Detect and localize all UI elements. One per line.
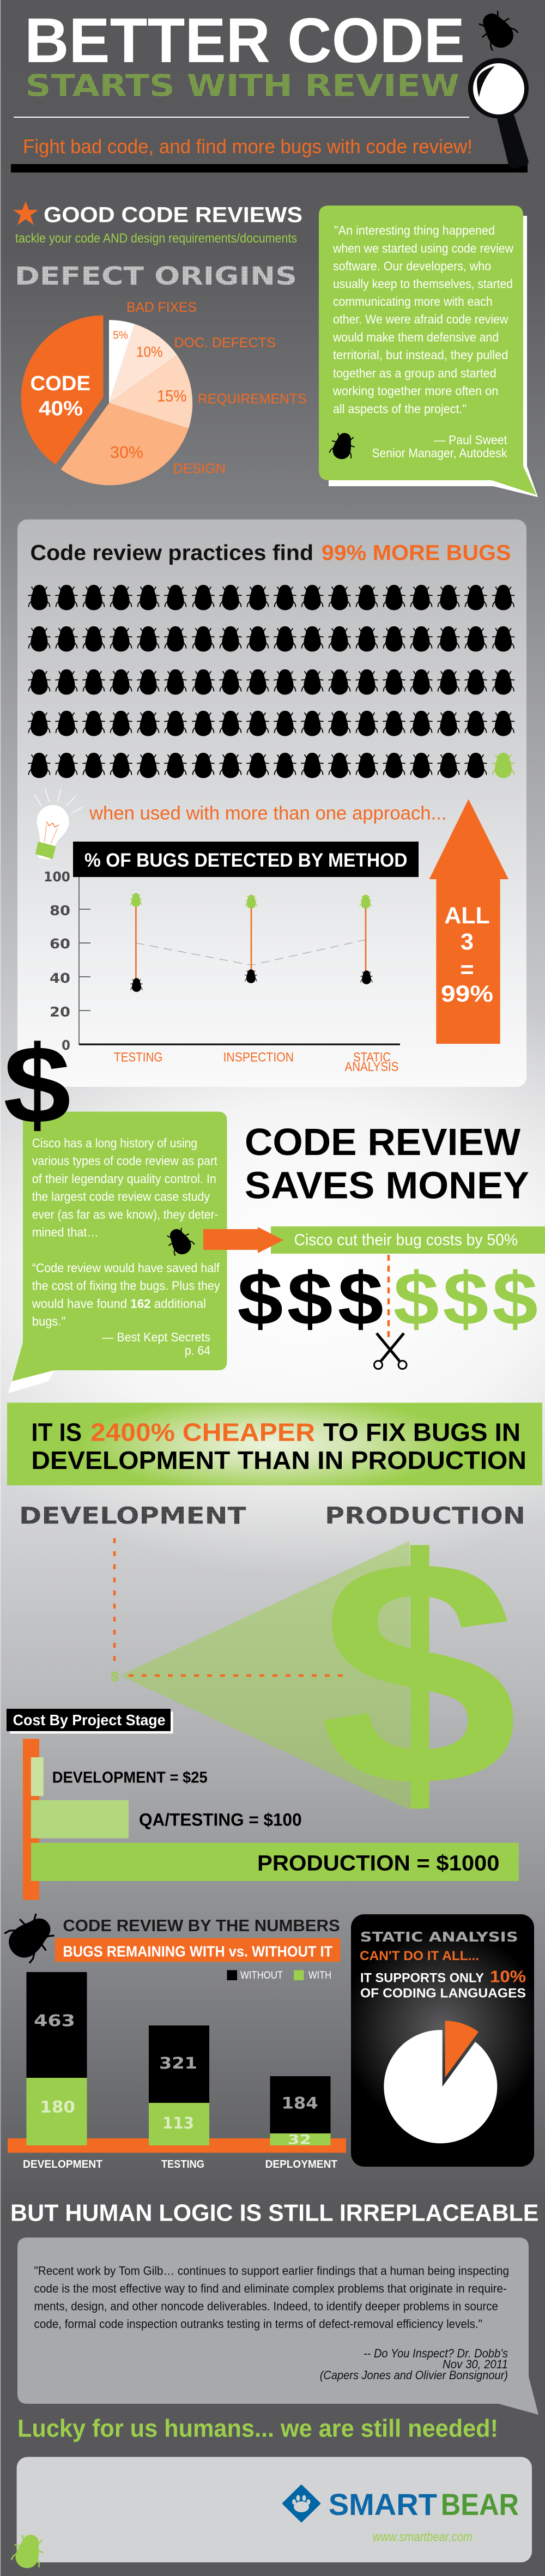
callout: tom gilb quote <box>17 2238 538 2415</box>
pie chart: defect origins: 5% <box>113 329 128 341</box>
pie chart: defect origins: CODE <box>31 372 90 395</box>
bar chart: DEVELOPMENT = $25 <box>52 1769 208 1787</box>
callout: tom gilb quote: "Recent work by Tom Gilb… continues to support earlier findings that a human being inspecting <box>34 2264 509 2277</box>
callout: autodesk quote: other. We were afraid code review <box>333 312 508 326</box>
callout: cisco case study: p. 64 <box>185 1343 210 1357</box>
header <box>11 5 529 172</box>
heading: CODE REVIEW BY THE NUMBERS <box>63 1916 340 1935</box>
dollar row: $ <box>492 1257 538 1341</box>
bar chart: bugs remaining: 184 <box>282 2094 318 2113</box>
callout: tom gilb quote: ments, design, and other noncode deliverables. Indeed, to identify deeper problems in source <box>34 2299 498 2313</box>
pie chart: 10 percent <box>384 2021 497 2143</box>
logo: smartbear <box>283 2486 519 2521</box>
dollar row: $ <box>443 1257 488 1341</box>
panel: static analysis: 10% <box>490 1967 526 1986</box>
legend: WITH <box>308 1970 331 1981</box>
panel: cost by project stage <box>7 1709 519 1900</box>
dollar row: $ <box>287 1257 333 1341</box>
callout: autodesk quote <box>319 205 538 497</box>
callout: autodesk quote: Senior Manager, Autodesk <box>372 446 507 460</box>
banner: cisco cut bug costs: Cisco cut their bug costs by 50% <box>294 1231 518 1249</box>
heading: production: PRODUCTION <box>325 1502 525 1529</box>
bar chart: PRODUCTION = $1000 <box>257 1851 499 1875</box>
banner: cisco cut bug costs <box>271 1226 545 1254</box>
pie labels <box>126 300 306 476</box>
icon: bug in cisco quote <box>164 1224 196 1259</box>
panel: static analysis <box>351 1914 534 2167</box>
callout: cisco case study: Cisco has a long history of using <box>32 1136 197 1150</box>
pie chart: defect origins: 30% <box>110 443 143 462</box>
chart: percent of bugs detected by method: % OF BUGS DETECTED BY METHOD <box>84 850 408 871</box>
bar chart: bugs remaining: 32 <box>288 2132 311 2148</box>
banner: 2400% cheaper: IT IS <box>31 1418 82 1447</box>
axis numbers: 60 <box>50 936 70 952</box>
axis numbers: 0 <box>62 1037 70 1053</box>
chart x labels <box>114 1050 399 1074</box>
pie labels: DESIGN <box>173 461 226 476</box>
chart title <box>73 842 419 877</box>
pie chart: defect origins: 10% <box>136 343 162 360</box>
panel: code review by the numbers <box>0 1907 346 2170</box>
callout: autodesk quote: "An interesting thing happened <box>334 223 495 238</box>
callout: cisco case study: ever (as far as we know), they deter- <box>32 1207 218 1222</box>
banner: 2400% cheaper: DEVELOPMENT THAN IN PRODUCTION <box>31 1446 526 1474</box>
bar chart: bugs remaining <box>8 1972 346 2170</box>
callout: autodesk quote: would make them defensive and <box>332 330 499 344</box>
heading: 99% more bugs: Code review practices find <box>31 541 313 565</box>
callout: autodesk quote: usually keep to themselves, started <box>333 277 513 291</box>
callout: autodesk quote: software. Our developers, who <box>333 259 491 273</box>
arrow: orange <box>203 1227 283 1253</box>
bar chart: bugs remaining: DEPLOYMENT <box>265 2158 337 2170</box>
banner: 2400% cheaper: 2400% CHEAPER <box>90 1418 315 1447</box>
pie labels: DOC. DEFECTS <box>174 335 276 350</box>
chart x labels: TESTING <box>114 1050 162 1065</box>
callout: autodesk quote: working together more often on <box>332 384 498 398</box>
axis numbers <box>44 869 70 1053</box>
dollar row <box>237 1257 538 1341</box>
callout: autodesk quote: together as a group and started <box>333 366 496 380</box>
pie chart: defect origins: 40% <box>39 397 83 420</box>
heading: code review saves money <box>245 1121 529 1207</box>
arrow: all 3 = 99% <box>429 799 508 1044</box>
text: when used with more than one approach: when used with more than one approach... <box>89 802 446 824</box>
arrow: all 3 = 99%: = <box>460 957 474 983</box>
arrow: all 3 = 99%: 3 <box>461 929 474 955</box>
panel: development vs production <box>19 1493 525 1853</box>
icon: light bulb <box>34 789 83 860</box>
legend: WITHOUT <box>240 1970 283 1981</box>
chart x labels: ANALYSIS <box>344 1060 399 1074</box>
pie chart: defect origins <box>21 315 192 485</box>
heading: code review saves money: SAVES MONEY <box>245 1164 529 1207</box>
panel: static analysis: CAN'T DO IT ALL... <box>360 1949 479 1963</box>
pie labels: REQUIREMENTS <box>198 391 306 407</box>
icon: magnifying glass <box>468 58 529 168</box>
heading: Cost By Project Stage <box>13 1712 166 1728</box>
icon: bug <box>0 1907 60 1967</box>
callout: tom gilb quote: -- Do You Inspect? Dr. Dobb's <box>364 2347 508 2360</box>
tagline: Fight bad code, and find more bugs with code review! <box>23 135 473 158</box>
bar chart: bugs remaining: DEVELOPMENT <box>23 2158 102 2170</box>
bar chart: bugs remaining: 113 <box>162 2114 194 2132</box>
callout: cisco case study: would have found 162 additional <box>32 1296 206 1310</box>
panel: code review saves money <box>203 1121 545 1369</box>
black underline bar <box>11 164 528 172</box>
panel: code review practices <box>17 519 526 1087</box>
icon: bug in quote <box>329 430 357 462</box>
subtitle: starts with review: STARTS WITH REVIEW <box>26 68 459 103</box>
panel: good code reviews <box>13 201 306 485</box>
logo: smartbear: SMART <box>329 2487 437 2521</box>
callout: autodesk quote: communicating more with each <box>333 294 493 309</box>
dollar row: $ <box>237 1257 283 1341</box>
chart x labels: INSPECTION <box>223 1050 294 1065</box>
heading: code review saves money: CODE REVIEW <box>245 1121 520 1163</box>
chart x labels: STATIC <box>353 1050 391 1065</box>
heading: development: DEVELOPMENT <box>19 1502 246 1529</box>
callout: cisco case study: the cost of fixing the bugs. Plus they <box>32 1279 220 1293</box>
heading <box>7 1709 173 1733</box>
callout: autodesk quote: all aspects of the project." <box>333 402 467 416</box>
heading: defect origins: DEFECT ORIGINS <box>15 262 297 291</box>
dashed cut line <box>387 1255 390 1339</box>
callout: autodesk quote: — Paul Sweet <box>434 433 507 447</box>
bar chart: bugs remaining: TESTING <box>161 2158 204 2170</box>
arrow: all 3 = 99%: ALL <box>444 903 490 929</box>
text: lucky for us humans: Lucky for us humans... we are still needed! <box>17 2415 498 2442</box>
axis numbers: 100 <box>44 869 70 885</box>
title: better code: BETTER CODE <box>25 5 465 76</box>
subheading band: BUGS REMAINING WITH vs. WITHOUT IT <box>63 1943 332 1960</box>
panel: static analysis: OF CODING LANGUAGES <box>360 1986 526 2000</box>
banner: 2400% cheaper <box>7 1403 542 1485</box>
bug grid: 99 of 100 bugs <box>28 585 514 778</box>
icon: scissors <box>374 1333 407 1369</box>
axis numbers: 20 <box>50 1004 70 1020</box>
subheading: tackle your code AND design requirements/documents <box>15 231 297 246</box>
pie labels: BAD FIXES <box>126 300 197 315</box>
arrow: all 3 = 99%: 99% <box>441 981 493 1007</box>
axis numbers: 80 <box>50 903 70 918</box>
callout: cisco case study: various types of code review as part <box>32 1154 218 1168</box>
icon: small dollar: $ <box>111 1669 119 1684</box>
bar chart: bugs remaining: 321 <box>159 2054 197 2072</box>
callout: autodesk quote: territorial, but instead, they pulled <box>333 348 508 362</box>
icon: large dollar: $ <box>319 1493 518 1853</box>
dollar row: $ <box>338 1257 384 1341</box>
callout: cisco case study: — Best Kept Secrets <box>102 1330 210 1344</box>
bar chart: bugs remaining: 463 <box>34 2011 75 2030</box>
icon: green bug <box>10 2531 47 2572</box>
callout: cisco case study: the largest code review case study <box>32 1189 210 1204</box>
bar chart: QA/TESTING = $100 <box>139 1810 302 1829</box>
callout: cisco case study: bugs.” <box>32 1314 65 1328</box>
callout: cisco case study <box>8 1112 227 1393</box>
heading: good code reviews: GOOD CODE REVIEWS <box>44 203 302 227</box>
axis numbers: 40 <box>50 970 70 986</box>
callout: autodesk quote: when we started using code review <box>332 241 513 255</box>
cone of cost <box>120 1541 409 1810</box>
website: www.smartbear.com <box>373 2530 473 2544</box>
callout: tom gilb quote: code is the most effective way to find and eliminate complex problems that originate in require- <box>34 2282 507 2295</box>
callout: cisco case study: “Code review would have saved half <box>32 1261 220 1275</box>
heading: human logic: BUT HUMAN LOGIC IS STILL IRREPLACEABLE <box>10 2200 538 2226</box>
pie chart: defect origins: 15% <box>157 387 186 406</box>
subheading band <box>55 1938 340 1962</box>
icon: big black dollar sign: $ <box>3 1023 71 1147</box>
banner: 2400% cheaper: TO FIX BUGS IN <box>323 1418 520 1447</box>
chart: percent of bugs detected by method <box>44 842 419 1074</box>
icon: bug on top of magnifier <box>474 6 521 55</box>
heading: 99% more bugs <box>31 541 511 565</box>
callout: cisco case study: mined that… <box>32 1225 99 1239</box>
panel: static analysis: STATIC ANALYSIS <box>360 1929 518 1945</box>
callout: tom gilb quote: code, formal code inspection outranks testing in terms of defect-removal efficiency levels." <box>34 2317 482 2331</box>
legend <box>227 1970 331 1981</box>
dashed axes <box>114 1538 347 1676</box>
icon: star <box>13 201 38 225</box>
dollar row: $ <box>393 1257 439 1341</box>
logo: smartbear: BEAR <box>441 2487 519 2521</box>
callout: cisco case study: of their legendary quality control. In <box>32 1171 216 1186</box>
panel: static analysis: IT SUPPORTS ONLY <box>360 1971 484 1985</box>
callout: tom gilb quote: Nov 30, 2011 <box>443 2357 508 2371</box>
bar chart: bugs remaining: 180 <box>40 2097 75 2116</box>
bar chart <box>23 1739 519 1900</box>
callout: tom gilb quote: (Capers Jones and Olivier Bonsignour) <box>320 2368 508 2382</box>
panel: footer <box>10 2457 532 2572</box>
heading: 99% more bugs: 99% MORE BUGS <box>322 541 511 565</box>
